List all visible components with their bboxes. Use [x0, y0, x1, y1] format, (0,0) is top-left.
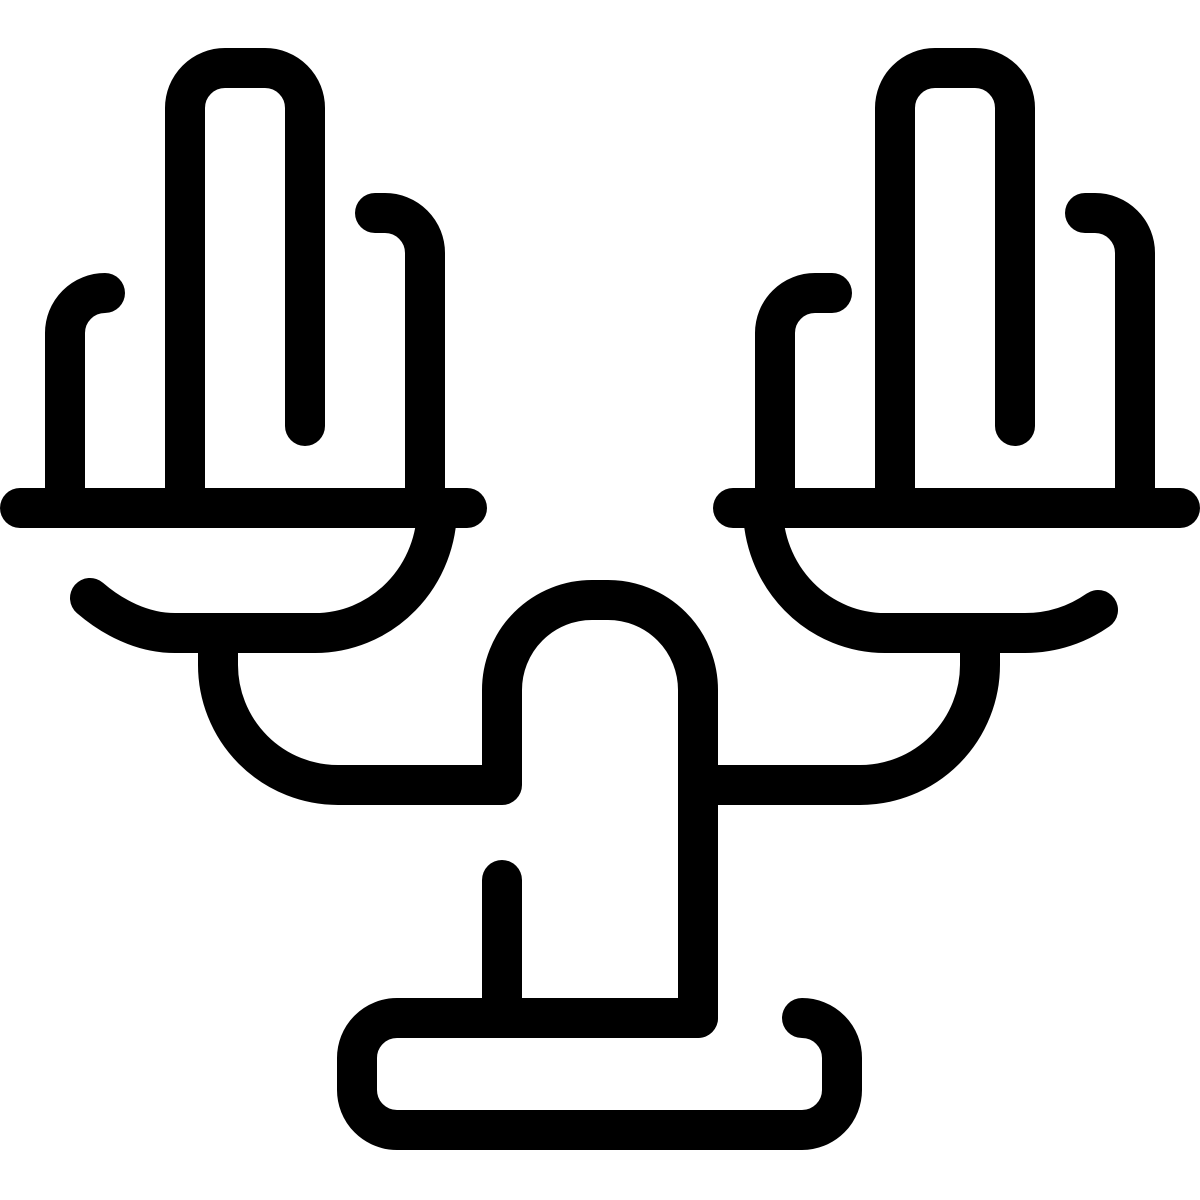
left arm candles	[65, 68, 425, 508]
central stem and arms	[218, 600, 980, 1018]
base	[357, 880, 842, 1130]
left dish	[20, 508, 467, 633]
right arm candles	[775, 68, 1135, 508]
right dish	[733, 508, 1180, 633]
